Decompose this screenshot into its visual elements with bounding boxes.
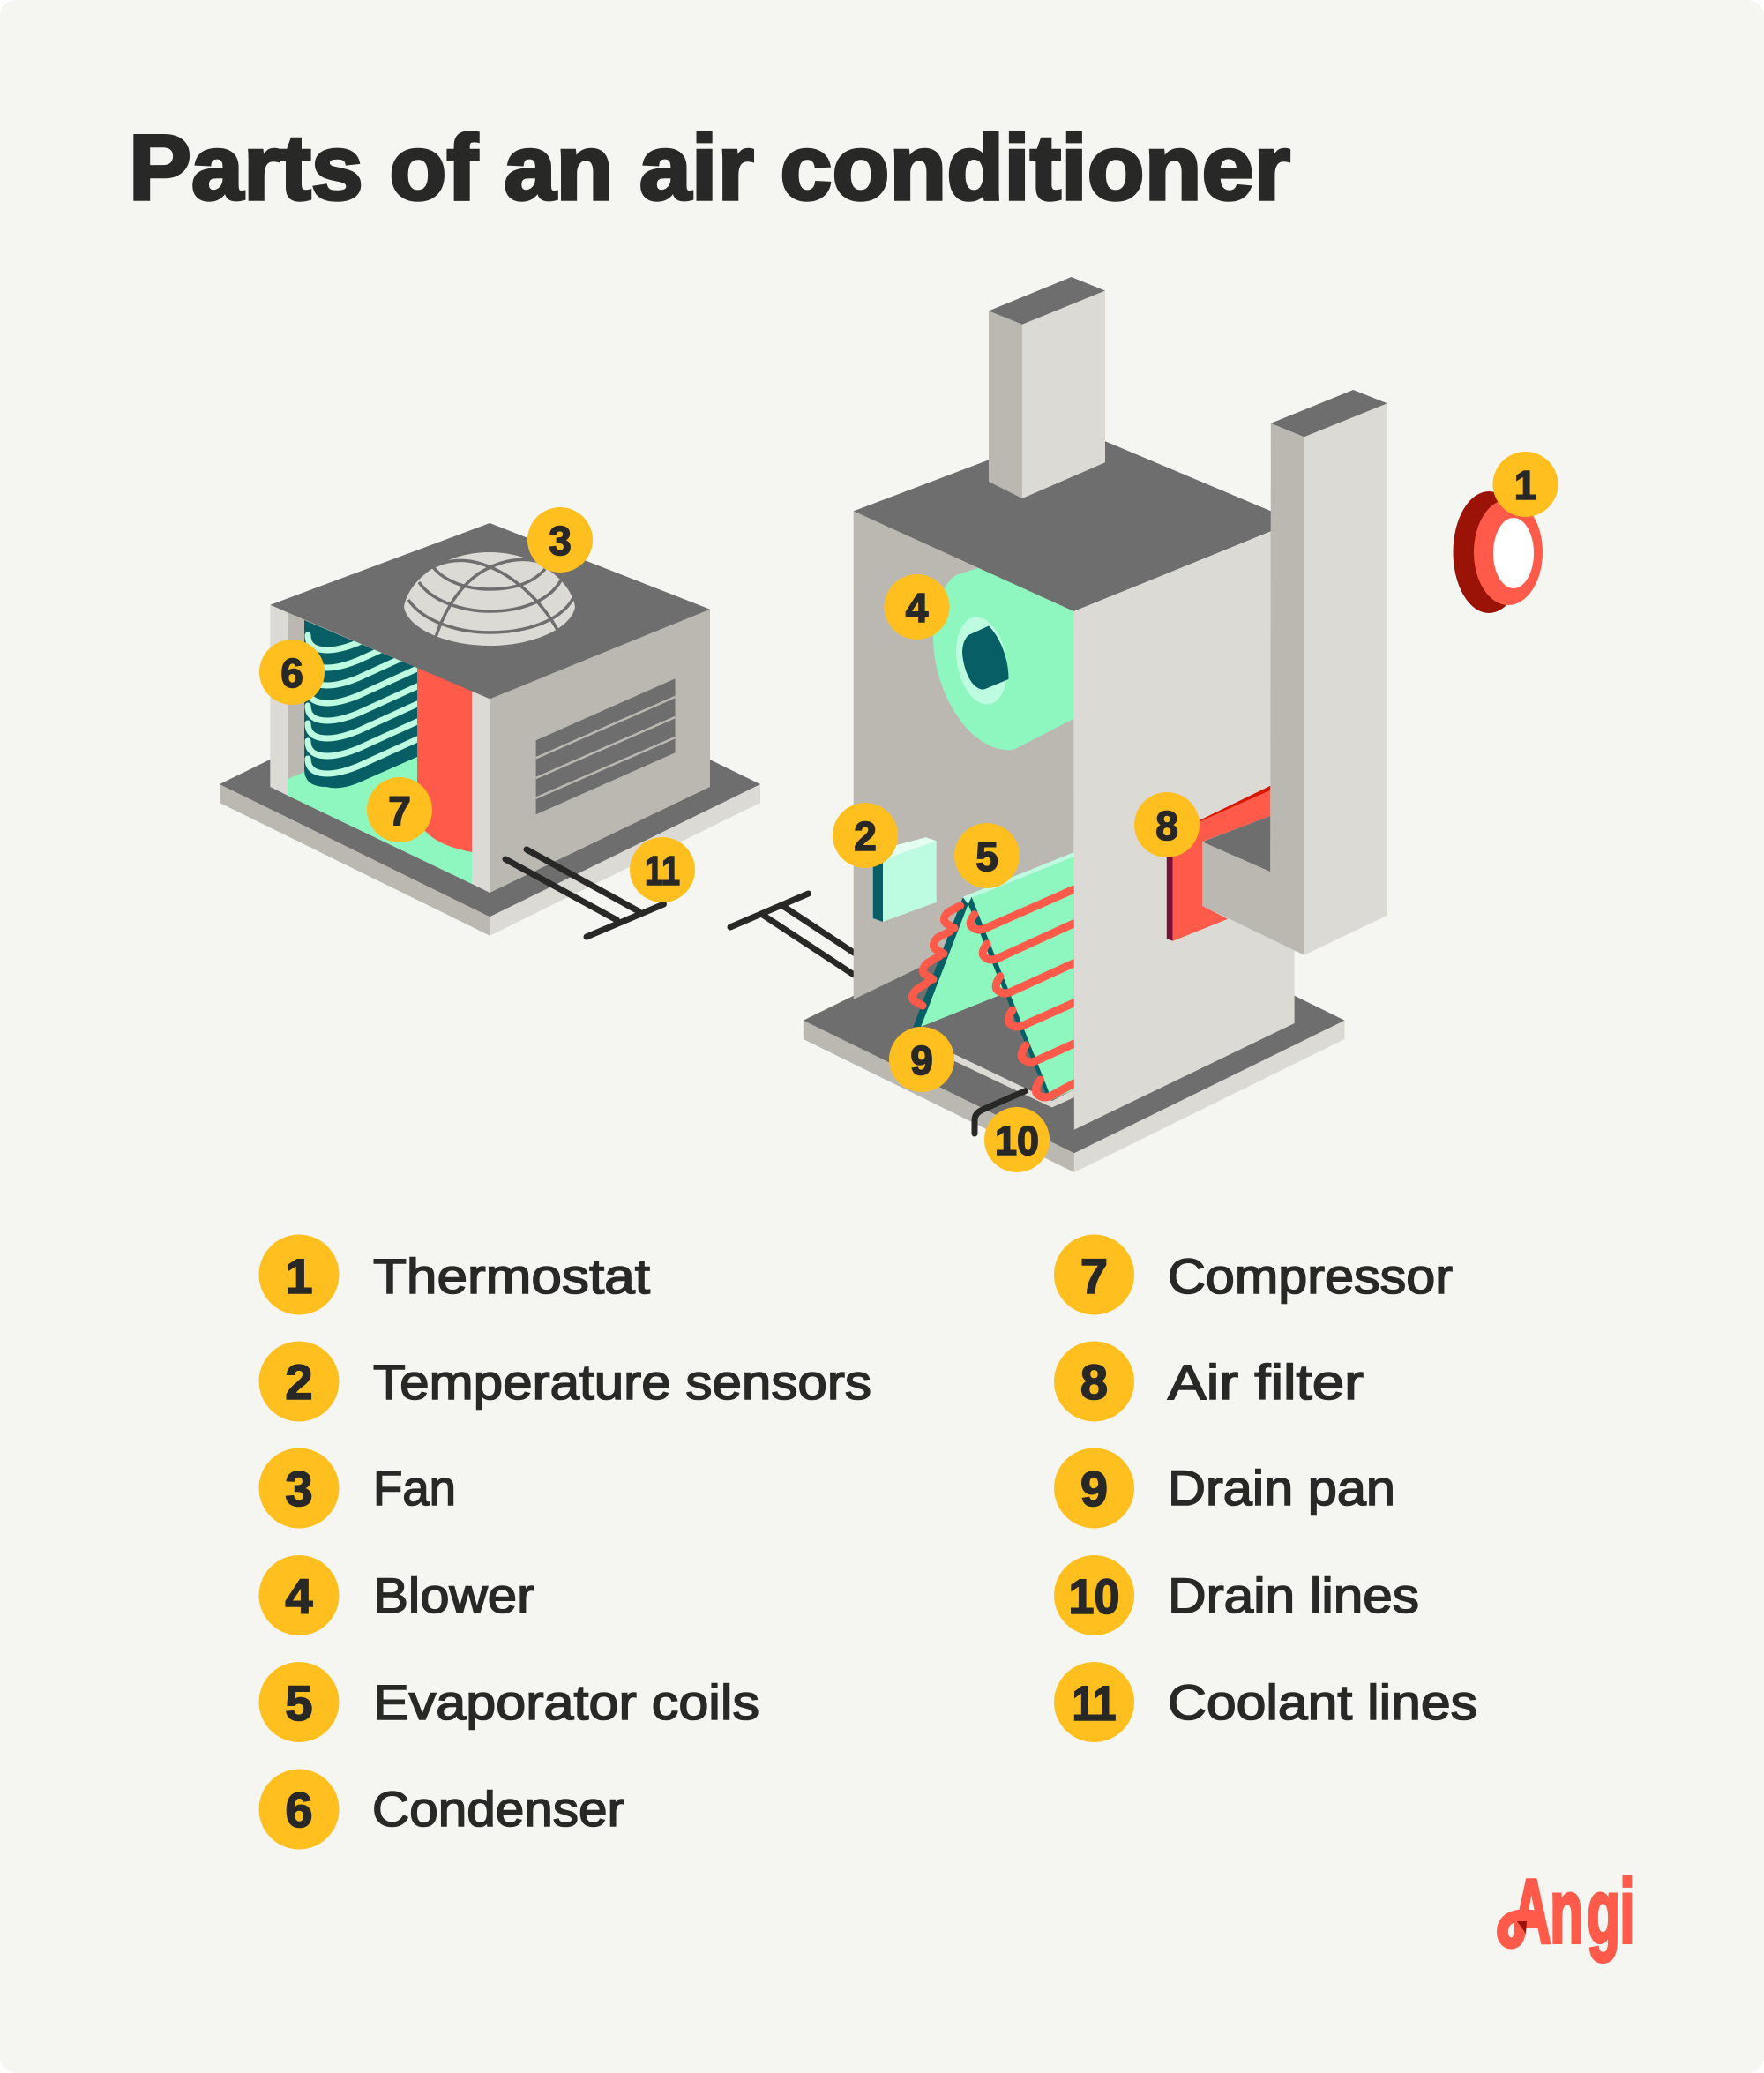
legend item 3 [259, 1448, 456, 1528]
legend item 10: 10 [1069, 1568, 1120, 1624]
badge 10: 10 [995, 1118, 1039, 1164]
legend item 9: Drain pan [1168, 1460, 1395, 1515]
badge 9: 9 [910, 1037, 933, 1083]
badge 8: 8 [1155, 803, 1178, 849]
outdoor unit mint floor [288, 750, 472, 884]
legend item 11: Coolant lines [1168, 1674, 1477, 1730]
legend item 1: Thermostat [373, 1248, 650, 1304]
legend item 8 [1054, 1341, 1364, 1422]
return duct [1202, 390, 1387, 955]
legend item 2 [259, 1341, 871, 1422]
legend item 8: 8 [1080, 1354, 1108, 1410]
indoor base plate [804, 887, 1344, 1172]
indoor unit left face [854, 511, 1074, 999]
supply chimney [989, 277, 1105, 498]
legend item 2: 2 [285, 1354, 313, 1410]
badge 7: 7 [388, 788, 411, 834]
legend item 6 [259, 1770, 624, 1849]
legend right column [1054, 1235, 1477, 1742]
legend left column [259, 1235, 871, 1849]
legend item 4: Blower [373, 1568, 534, 1623]
legend item 9: 9 [1080, 1461, 1108, 1516]
legend item 7: Compressor [1168, 1248, 1453, 1304]
legend item 9 [1054, 1448, 1395, 1528]
legend item 2: Temperature sensors [373, 1354, 871, 1410]
evaporator coils [912, 852, 1074, 1108]
diagram number badges [259, 452, 1558, 1172]
badge 11 [630, 837, 695, 902]
badge 1: 1 [1514, 462, 1536, 508]
badge 5: 5 [975, 834, 998, 879]
badge 8 [1134, 792, 1200, 857]
badge 6: 6 [280, 650, 303, 696]
badge 1 [1492, 452, 1558, 517]
badge 4 [884, 574, 949, 640]
legend item 11: 11 [1073, 1675, 1117, 1731]
Angi logo: Angi [1512, 1860, 1635, 1962]
legend item 1 [259, 1235, 650, 1314]
indoor unit roof [854, 428, 1271, 611]
drain line [975, 1091, 1025, 1134]
legend item 3: Fan [373, 1460, 456, 1515]
outdoor condenser unit [220, 523, 760, 937]
badge 11: 11 [645, 848, 680, 894]
badge 7 [367, 777, 432, 842]
legend item 5: Evaporator coils [373, 1674, 759, 1730]
legend item 11 [1054, 1662, 1477, 1742]
temperature sensor box [873, 837, 937, 922]
legend item 6: 6 [285, 1782, 313, 1837]
legend item 10 [1054, 1555, 1419, 1635]
indoor air handler unit [804, 277, 1387, 1172]
badge 4: 4 [906, 585, 929, 631]
outdoor unit front post [472, 691, 490, 893]
thermostat [1454, 491, 1543, 613]
legend item 8: Air filter [1168, 1354, 1364, 1410]
badge 6 [259, 640, 325, 705]
legend item 5: 5 [285, 1675, 313, 1731]
badge 5 [954, 823, 1020, 888]
legend item 4 [259, 1555, 534, 1635]
badge 3: 3 [549, 518, 572, 564]
badge 9 [889, 1027, 954, 1092]
air filter [1167, 786, 1270, 941]
badge 2 [833, 803, 898, 868]
badge 10 [984, 1107, 1050, 1172]
indoor unit right face [1074, 522, 1295, 1130]
badge 3 [527, 507, 593, 573]
outdoor base plate [220, 652, 760, 936]
badge 2: 2 [854, 813, 877, 859]
legend item 3: 3 [285, 1461, 313, 1516]
title: Parts of an air conditioner [129, 116, 1290, 220]
condenser coil [304, 616, 417, 788]
legend item 4: 4 [285, 1568, 313, 1624]
legend item 1: 1 [285, 1248, 313, 1304]
outdoor unit right face [490, 610, 710, 893]
legend item 7 [1054, 1235, 1453, 1314]
drain pan [949, 1054, 1074, 1108]
outdoor unit left post [270, 605, 288, 796]
outdoor unit interior wall [288, 612, 472, 884]
blower housing [933, 568, 1074, 750]
legend item 10: Drain lines [1168, 1568, 1419, 1623]
outdoor unit roof [270, 523, 710, 699]
legend item 7: 7 [1080, 1248, 1108, 1304]
coolant lines outlet [505, 849, 663, 937]
legend item 6: Condenser [372, 1781, 624, 1837]
side vent [536, 678, 676, 814]
fan dome [404, 552, 575, 646]
coolant lines inlet [730, 894, 854, 975]
legend item 5 [259, 1662, 759, 1742]
compressor [417, 667, 472, 852]
